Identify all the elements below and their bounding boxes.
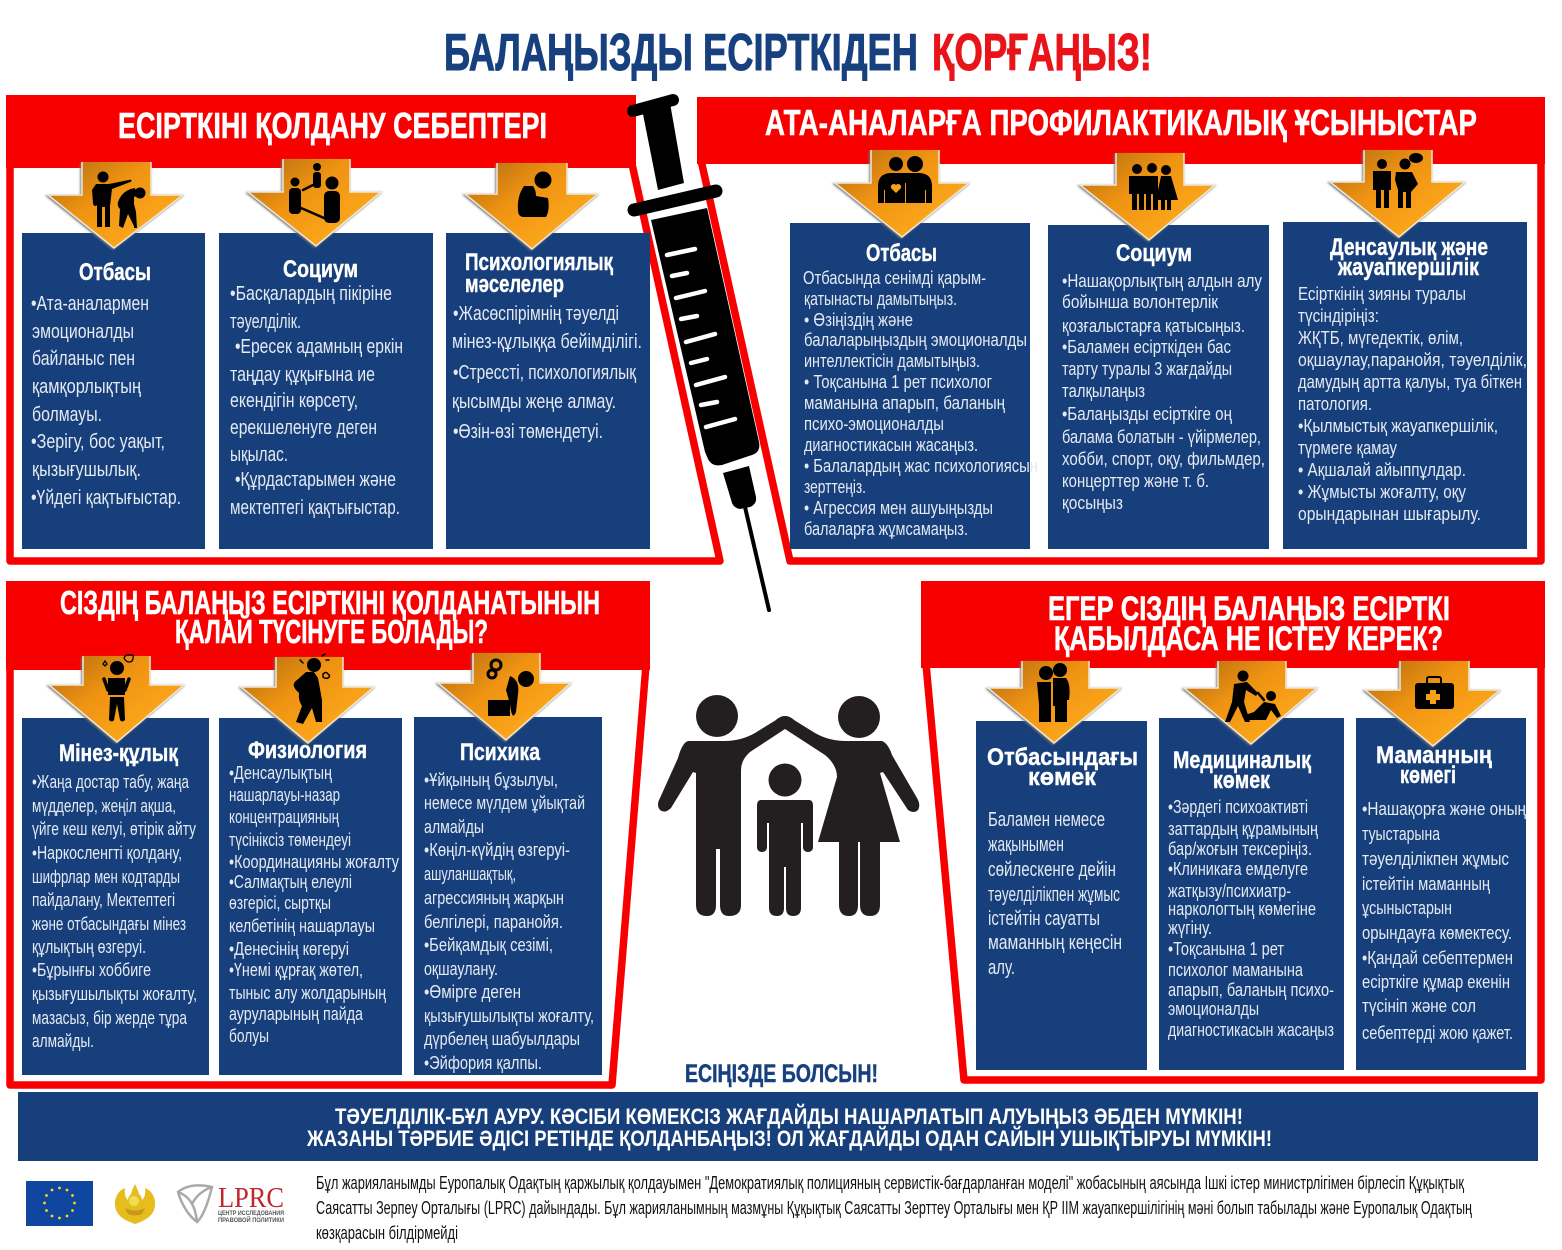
card: family: зерттеңіз. [804,476,866,497]
panel frame [926,664,1541,1080]
card: specialist help: тәуелділікпен жұмыс [1362,848,1509,869]
panel header bar: СІЗДІҢ БАЛАҢЫЗ ЕСІРТКІНІ ҚОЛДАНАТЫНЫН [60,584,600,621]
arrow with icon: two people talking [1330,150,1465,237]
card: psychological problems [446,233,650,549]
card: specialist help: Маманның [1376,742,1492,769]
card: physiology: өзгерісі, сыртқы [229,892,331,913]
card: medical help: жүгіну. [1168,917,1212,938]
panel header bar: ҚАЛАЙ ТҮСІНУГЕ БОЛАДЫ? [175,612,488,650]
arrow with icon: three people [248,159,381,246]
card: family: қызығушылық. [32,459,141,481]
child [757,764,813,916]
card: family help: сөйлескенге дейін [988,859,1116,881]
card: physiology: ауруларының пайда [229,1003,364,1024]
card: society: •Құрдастарымен және [235,469,396,491]
card: society: тарту туралы 3 жағдайды [1062,358,1232,379]
card: psyche: белгілері, паранойя. [424,911,563,932]
card: family: диагностикасын жасаңыз. [804,434,978,455]
father [658,695,794,916]
card: specialist help: себептерді жою қажет. [1362,1022,1513,1043]
card: society [219,233,433,549]
arrow with icon: person helping fallen person [1184,661,1317,744]
logo: LPRC: ЦЕНТР ИССЛЕДОВАНИЯ [218,1211,284,1217]
card: psychological problems: қысымды жеңе алмау. [452,391,616,413]
card: family help: Баламен немесе [988,809,1105,831]
card: health and responsibility: Денсаулық және [1330,234,1488,261]
card: health and responsibility: жауапкершілік [1337,254,1480,281]
arrow with icon: person hugging knees [465,163,598,249]
card: medical help: наркологтың көмегіне [1168,898,1316,919]
card: psyche: •Өмірге деген [424,981,521,1002]
card: physiology: •Үнемі құрғақ жөтел, [229,959,363,980]
panel frame [10,164,720,561]
card: family: • Балалардың жас психологиясын [804,455,1038,476]
card: psyche: •Ұйқының бұзылуы, [424,769,558,790]
card: society: •Ересек адамның еркін [235,336,403,358]
card: physiology: •Координацияны жоғалту [229,851,400,872]
card: behaviour: қызығушылықты жоғалту, [32,983,197,1004]
card: family: • Өзіңіздің және [804,309,913,330]
arrow with icon: first aid kit [1365,661,1500,746]
logo: LPRC [178,1183,284,1224]
card: health and responsibility: патология. [1298,393,1372,414]
card: society: ықылас. [230,444,288,466]
arrow with icon: angry person [49,655,184,742]
card: physiology [219,718,402,1075]
banner: key warning [18,1092,1538,1161]
panel header bar [697,97,1545,164]
card: physiology: •Денсаулықтың [229,762,333,783]
card: physiology: Физиология [248,737,367,764]
card: society: Социум [1116,240,1192,267]
card: physiology: келбетінің нашарлауы [229,915,375,936]
card: medical help [1159,718,1344,1070]
card: psychological problems: •Жасөспірімнің тәуелді [453,303,619,325]
card: family: • Агрессия мен ашуыңызды [804,497,993,518]
card: family: •Зерігу, бос уақыт, [31,431,165,453]
panel: how to recognise drug use [6,581,650,1085]
card: behaviour: алмайды. [32,1030,94,1051]
card: health and responsibility: Есірткінің зияны туралы [1298,283,1466,304]
card: physiology: •Денесінің көгеруі [229,938,349,959]
graduation marks [667,249,735,427]
footer disclaimer: көзқарасын білдірмейді [316,1223,458,1243]
card: psyche: Психика [460,739,541,766]
title: ҚОРҒАҢЫЗ! [932,24,1152,82]
card: family help [976,721,1147,1070]
card: society: •Басқалардың пікіріне [230,283,392,305]
card: health and responsibility: • Жұмысты жоғалту, оқу [1298,481,1467,502]
card: medical help: •Клиникаға емделуге [1168,858,1308,879]
card: specialist help: орындауға көмектесу. [1362,922,1512,943]
plunger handle [633,100,673,111]
card: specialist help: туыстарына [1362,823,1441,844]
card: behaviour: және отбасындағы мінез [32,913,186,934]
card: family help: көмек [1028,764,1097,791]
card: physiology: тыныс алу жолдарының [229,982,387,1003]
card: society: концерттер және т. б. [1062,470,1209,491]
mother [776,696,919,916]
card: family: байланыс пен [32,348,135,370]
card: medical help: көмек [1213,767,1271,794]
panel: what to do if your child uses drugs [921,581,1545,1080]
card: specialist help: есірткіге құмар екенін [1362,971,1510,992]
card: physiology: түсініксіз төмендеуі [229,829,351,850]
card: family help: істейтін сауатты [988,908,1100,930]
card: psyche: агрессияның жарқын [424,887,564,908]
card: health and responsibility: түрмеге қамау [1298,437,1398,458]
panel header bar: ЕСІРТКІНІ ҚОЛДАНУ СЕБЕПТЕРІ [118,105,547,146]
arrow with icon: three people group [1080,153,1215,240]
card: medical help: апарып, баланың психо- [1168,979,1334,1000]
card: behaviour: •Жаңа достар табу, жаңа [32,771,190,792]
card: psyche: дүрбелең шабуылдары [424,1028,580,1049]
arrow with icon: pointing adult and bent child [48,162,183,248]
card: society: •Балаңызды есірткіге оң [1062,403,1233,424]
card: psychological problems: мәселелер [465,271,564,298]
card: behaviour: үйге кеш келуі, өтірік айту [32,818,197,839]
plunger shaft [642,103,684,190]
card: medical help: заттардың құрамының [1168,818,1319,839]
panel frame [10,665,646,1085]
card: behaviour [22,718,209,1075]
card: physiology: •Салмақтың елеулі [229,871,352,892]
footer disclaimer [316,1173,1472,1243]
card: health and responsibility: ЖҚТБ, мүгедектік, өлім, [1298,327,1463,348]
arrow with icon: person in physical pain [241,654,374,743]
card: psyche [414,717,602,1075]
card: society: бойынша волонтерлік [1062,291,1219,312]
card: family: • Тоқсанына 1 рет психолог [804,371,992,392]
panel header bar [6,95,636,168]
card: behaviour: мазасыз, бір жерде тұра [32,1007,188,1028]
card: society: таңдау құқығына ие [230,364,375,386]
card: health and responsibility: түсіндіріңіз: [1298,305,1379,326]
card: medical help: •Тоқсанына 1 рет [1168,938,1284,959]
card: specialist help: істейтін маманның [1362,873,1491,894]
card: health and responsibility [1283,222,1527,549]
card: psyche: •Эйфория қалпы. [424,1052,542,1073]
card: family: психо-эмоционалды [804,413,944,434]
card: health and responsibility: • Ақшалай айыппұлдар. [1298,459,1466,480]
card: specialist help: •Нашақорға және оның [1362,798,1527,819]
card: psyche: •Бейқамдық сезімі, [424,934,553,955]
card: medical help: жатқызу/психиатр- [1168,880,1291,901]
card: family help: Отбасындағы [987,744,1138,771]
card: family: интеллектісін дамытыңыз. [804,350,980,371]
flange [634,191,716,210]
card: psyche: •Көңіл-күйдің өзгеруі- [424,839,570,860]
card: behaviour: пайдалану, Мектептегі [32,889,175,910]
card: society: ерекшеленуге деген [230,417,377,439]
card: psychological problems: •Өзін-өзі төмендетуі. [453,421,603,443]
card: psyche: ашуланшақтық, [424,863,516,884]
card: psychological problems: мінез-құлыққа бейімділігі. [452,331,642,353]
card: behaviour: Мінез-құлық [59,740,179,767]
card: behaviour: •Бұрынғы хоббиге [32,959,151,980]
card: medical help: эмоционалды [1168,998,1259,1019]
card: society: балама болатын - үйірмелер, [1062,426,1261,447]
logo: ministry emblem [115,1184,155,1224]
panel: preventive recommendations for parents [697,97,1545,561]
card: behaviour: шифрлар мен кодтарды [32,866,180,887]
reminder heading: ЕСІҢІЗДЕ БОЛСЫН! [685,1060,878,1088]
card: psychological problems: •Стрессті, психологиялық [453,362,636,384]
card: family: •Үйдегі қақтығыстар. [31,487,181,509]
card: society [1048,225,1269,549]
card: family: маманына апарып, баланың [804,392,1006,413]
card: family help: тәуелділікпен жұмыс [988,884,1120,906]
panel header bar [921,581,1545,668]
card: family [790,223,1038,549]
card: society: хобби, спорт, оқу, фильмдер, [1062,448,1265,469]
card: specialist help: көмегі [1400,762,1456,789]
title: БАЛАҢЫЗДЫ ЕСІРТКІДЕН [444,24,918,82]
card: medical help: диагностикасын жасаңыз [1168,1019,1334,1040]
banner: key warning: ЖАЗАНЫ ТӘРБИЕ ӘДІСІ РЕТІНДЕ ҚОЛДАНБАҢЫЗ! ОЛ ЖАҒДАЙДЫ ОДАН САЙЫН УШЫҚТЫРУЫ МҮМКІН! [306,1126,1272,1151]
card: health and responsibility: •Қылмыстық жауапкершілік, [1298,415,1498,436]
panel header bar [6,581,650,670]
card: specialist help: ұсыныстарын [1362,897,1452,918]
card: psyche: оқшаулану. [424,958,498,979]
card: society: тәуелділік. [230,311,301,333]
card: family help: алу. [988,957,1015,979]
card: family: •Ата-аналармен [31,293,149,315]
logo: EU flag [26,1181,93,1226]
card: family: эмоционалды [32,321,134,343]
illustration: family under a roof [658,695,919,916]
card: family: қатынасты дамытыңыз. [804,288,957,309]
logo: LPRC: ПРАВОВОЙ ПОЛИТИКИ [218,1216,284,1224]
card: society: •Нашақорлықтың алдын алу [1062,270,1263,291]
panel frame [701,160,1541,561]
card: medical help: бар/жоғын тексеріңіз. [1168,838,1312,859]
card: society: мектептегі қақтығыстар. [230,497,400,519]
card: family: болмауы. [32,404,102,426]
card: behaviour: мүдделер, жеңіл ақша, [32,795,176,816]
card: family: қамқорлықтың [32,376,141,398]
card: medical help: психолог маманына [1168,959,1304,980]
card: family: Отбасында сенімді қарым- [803,267,986,288]
card: family help: маманның кеңесін [988,932,1122,954]
card: specialist help [1356,718,1527,1070]
card: behaviour: құлықтың өзгеруі. [32,936,146,957]
card: physiology: концентрацияның [229,806,340,827]
barrel [651,208,759,465]
card: specialist help: түсініп және сол [1362,995,1476,1016]
card: psychological problems: Психологиялық [465,249,614,276]
card: psyche: немесе мүлдем ұйықтай [424,792,585,813]
card: medical help: Медициналық [1173,747,1312,774]
card: society: Социум [283,256,358,283]
arrow with icon: embracing couple with heart [835,150,969,237]
card: family: балаларға жұмсамаңыз. [804,518,968,539]
hub [723,466,756,509]
card: society: екендігін көрсету, [230,390,358,412]
card: psyche: алмайды [424,816,484,837]
panel: causes of drug use [6,95,720,561]
card: family [22,233,205,549]
card: specialist help: •Қандай себептермен [1362,947,1513,968]
card: family help: жақынымен [988,834,1064,856]
card: physiology: болуы [229,1025,269,1046]
logo: LPRC: LPRC [218,1183,284,1214]
card: society: •Баламен есірткіден бас [1062,336,1231,357]
banner: key warning: ТӘУЕЛДІЛІК-БҰЛ АУРУ. КӘСІБИ КӨМЕКСІЗ ЖАҒДАЙДЫ НАШАРЛАТЫП АЛУЫҢЫЗ ӘБДЕН МҮМКІН! [335,1104,1243,1129]
card: psyche: қызығушылықты жоғалту, [424,1005,594,1026]
arrow with icon: head with wind-up key [438,653,571,740]
card: society: қозғалыстарға қатысыңыз. [1062,315,1245,336]
arrow with icon: supporting couple [988,661,1121,743]
card: family: балаларыңыздың эмоционалды [804,329,1027,350]
card: family: Отбасы [79,259,151,286]
card: society: қосыңыз [1062,492,1123,513]
card: society: талқылаңыз [1062,380,1145,401]
card: health and responsibility: оқшаулау,паранойя, тәуелділік, [1298,349,1527,370]
card: medical help: •Зәрдегі психоактивті [1168,796,1308,817]
card: physiology: нашарлауы-назар [229,784,340,805]
card: behaviour: •Наркосленгті қолдану, [32,842,182,863]
needle [745,507,769,610]
card: family: Отбасы [866,240,937,267]
card: health and responsibility: орындарынан шығарылу. [1298,503,1481,524]
illustration: syringe [633,100,769,610]
